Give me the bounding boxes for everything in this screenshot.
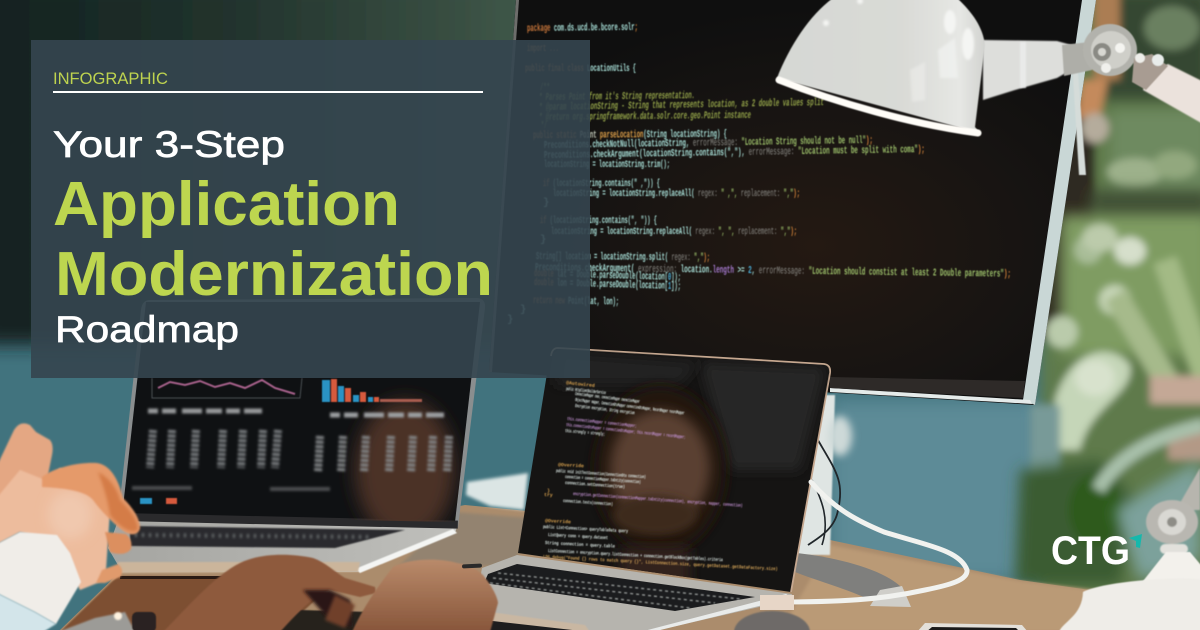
- left laptop: [108, 298, 485, 573]
- screen reflection and code: ListQuery conn = query.dataset: [548, 532, 608, 541]
- monitor code: * @param locationString - String that represents location, as 2 double values split: [539, 97, 824, 114]
- monitor code: locationString = locationString.replaceAll( regex: ", ", replacement: ",");: [551, 226, 797, 238]
- desk lamp: [777, 0, 1200, 175]
- translucent panel: [31, 40, 590, 378]
- monitor code: }: [507, 314, 513, 326]
- back fingers: [0, 423, 53, 525]
- laptop screen: [518, 348, 830, 592]
- title line 3: Modernization: [55, 240, 493, 309]
- wooden desk: [60, 473, 1100, 630]
- monitor code: double lat = Double.parseDouble(location[0]);: [534, 268, 681, 284]
- screen reflection and code: connection.tests(connection): [563, 498, 613, 507]
- foliage: [1015, 0, 1200, 630]
- screen reflection and code: @Override: [545, 518, 571, 525]
- screen reflection and code: public HttpClientBuilderService: [566, 386, 606, 396]
- screen reflection and code: @Override: [558, 462, 584, 469]
- palm: [0, 468, 110, 590]
- silver ornament: [1146, 468, 1200, 554]
- screen reflection and code: this.strongly = strongly;: [565, 428, 605, 437]
- monitor: [489, 0, 1096, 607]
- shirt sleeve: [0, 532, 81, 624]
- screen reflection and code: ListConnection = encryption.query.listConnection + connection.getBlockBox(getTables).criteria: [548, 548, 723, 563]
- laptop screen: [118, 298, 485, 527]
- monitor code: if (locationString.contains(", ")) {: [540, 215, 657, 227]
- monitor code: import ...: [527, 43, 559, 55]
- screen reflection and code: Encryption encryption, String encryption: [575, 403, 635, 416]
- screen reflection and code: try: [544, 492, 553, 498]
- white cable: [760, 482, 967, 610]
- title: [53, 123, 493, 350]
- data table: [132, 411, 449, 491]
- screen reflection and code: @Autowired: [566, 380, 595, 389]
- screen reflection and code: this.connectionMapper = connectionMapper;: [567, 416, 637, 429]
- screen reflection and code: public List<Connection> queryTableData query: [543, 524, 628, 534]
- monitor code: }: [543, 197, 549, 209]
- title line 1: Your 3-Step: [53, 123, 285, 165]
- lamp joint: [1062, 24, 1168, 90]
- screen reflection and code: }: [547, 488, 550, 494]
- monitor code: */: [541, 120, 547, 132]
- front keyboard strip: [485, 612, 590, 630]
- typing hands: [163, 555, 498, 630]
- lamp neck: [983, 40, 1078, 100]
- screen reflection and code: String connection = query.table: [545, 540, 615, 550]
- fingers: [42, 463, 140, 534]
- screen reflection and code: [543, 352, 826, 592]
- monitor stand and cables: [795, 395, 911, 607]
- screen reflection and code: this.connectionDtoMapper = connectionDtoMapper; this.recordMapper = recordMapper;: [566, 422, 686, 441]
- monitor code: }: [540, 234, 546, 246]
- second hand: [352, 560, 498, 630]
- lamp arm: [1143, 64, 1200, 128]
- screen reflection and code: connection.setConnection(true): [565, 480, 625, 490]
- monitor code: locationString = locationString.trim();: [544, 159, 670, 171]
- monitor code: if (locationString.contains(" ,")) {: [543, 178, 660, 190]
- monitor code: public final class LocationUtils {: [525, 63, 636, 75]
- monitor code: * @return org.springframework.data.solr.core.geo.Point instance: [539, 110, 751, 124]
- title line 2: Application: [53, 170, 400, 239]
- monitor code: * Parses Point from it's String representation.: [539, 90, 695, 104]
- bottom keyboard: [275, 610, 380, 630]
- eyebrow label: INFOGRAPHIC: [53, 70, 168, 88]
- monitor code: }: [520, 304, 526, 316]
- logo arrow: [1129, 534, 1142, 548]
- rule: [53, 91, 483, 93]
- monitor code: public static Point parseLocation(String locationString) {: [533, 129, 727, 142]
- lamp shade: [777, 0, 985, 133]
- monitor code: [507, 22, 1011, 326]
- monitor code: locationString = locationString.replaceAll( regex: " ,", replacement: ",");: [553, 188, 800, 200]
- monitor code: Preconditions.checkNotNull(locationString, errorMessage: "Location String should not be null");: [544, 135, 873, 152]
- phone and mouse: [734, 611, 1028, 630]
- monitor code: package com.ds.ucd.be.bcore.solr;: [527, 22, 638, 35]
- monitor code: Preconditions.checkArgument( expression: location.length >= 2, errorMessage: "Location should constist at least 2 Double parameters");: [535, 262, 1011, 281]
- laptop keyboard: [130, 526, 405, 548]
- title line 4: Roadmap: [55, 308, 239, 350]
- laptop base: [470, 555, 792, 630]
- screen reflection and code: connection = connectionMapper.toEntity(connection): [565, 474, 641, 485]
- monitor code: String[] location = locationString.split( regex: ",");: [536, 251, 710, 264]
- lamp stem strip: [1072, 60, 1086, 175]
- line chart: [152, 378, 302, 398]
- screen reflection and code: ObjectMapper mapper, ConnectionDtoMapper connectionDtoMapper, RecordMapper recordMapper: [575, 397, 685, 416]
- screen reflection and code: public void initTestConnection(ConnectionDto connection): [556, 468, 646, 480]
- CTG logo: CTG: [1051, 529, 1130, 573]
- screen reflection and code: encryption.getConnection(connectionMapper.toEntity(connection), encryption, mapper, connection): [573, 491, 743, 509]
- monitor code: return new Point(lat, lon);: [533, 295, 619, 309]
- wrist watch: [58, 612, 135, 630]
- left hand and sleeve: [0, 423, 156, 630]
- screen reflection and code: LOG.debug("Found {} rows to match query {}", ListConnection.size, query.getDataset.getDataFactory.size): [543, 554, 778, 572]
- laptop keyboard: [484, 564, 755, 611]
- monitor code: Preconditions.checkArgument(locationString.contains(","), errorMessage: "Location must be split with coma");: [544, 144, 925, 162]
- first hand: [163, 555, 376, 630]
- laptop dashboard: [132, 378, 455, 540]
- monitor code: double lon = Double.parseDouble(location[1]);: [534, 277, 681, 293]
- laptop base: [108, 518, 457, 572]
- lamp base: [1058, 468, 1200, 630]
- right laptop: [470, 348, 830, 630]
- bar chart: [322, 379, 422, 402]
- screen reflection and code: ConnectionMapper conn, connectionMapper connectionMapper: [575, 391, 640, 405]
- monitor code: /**: [540, 82, 550, 94]
